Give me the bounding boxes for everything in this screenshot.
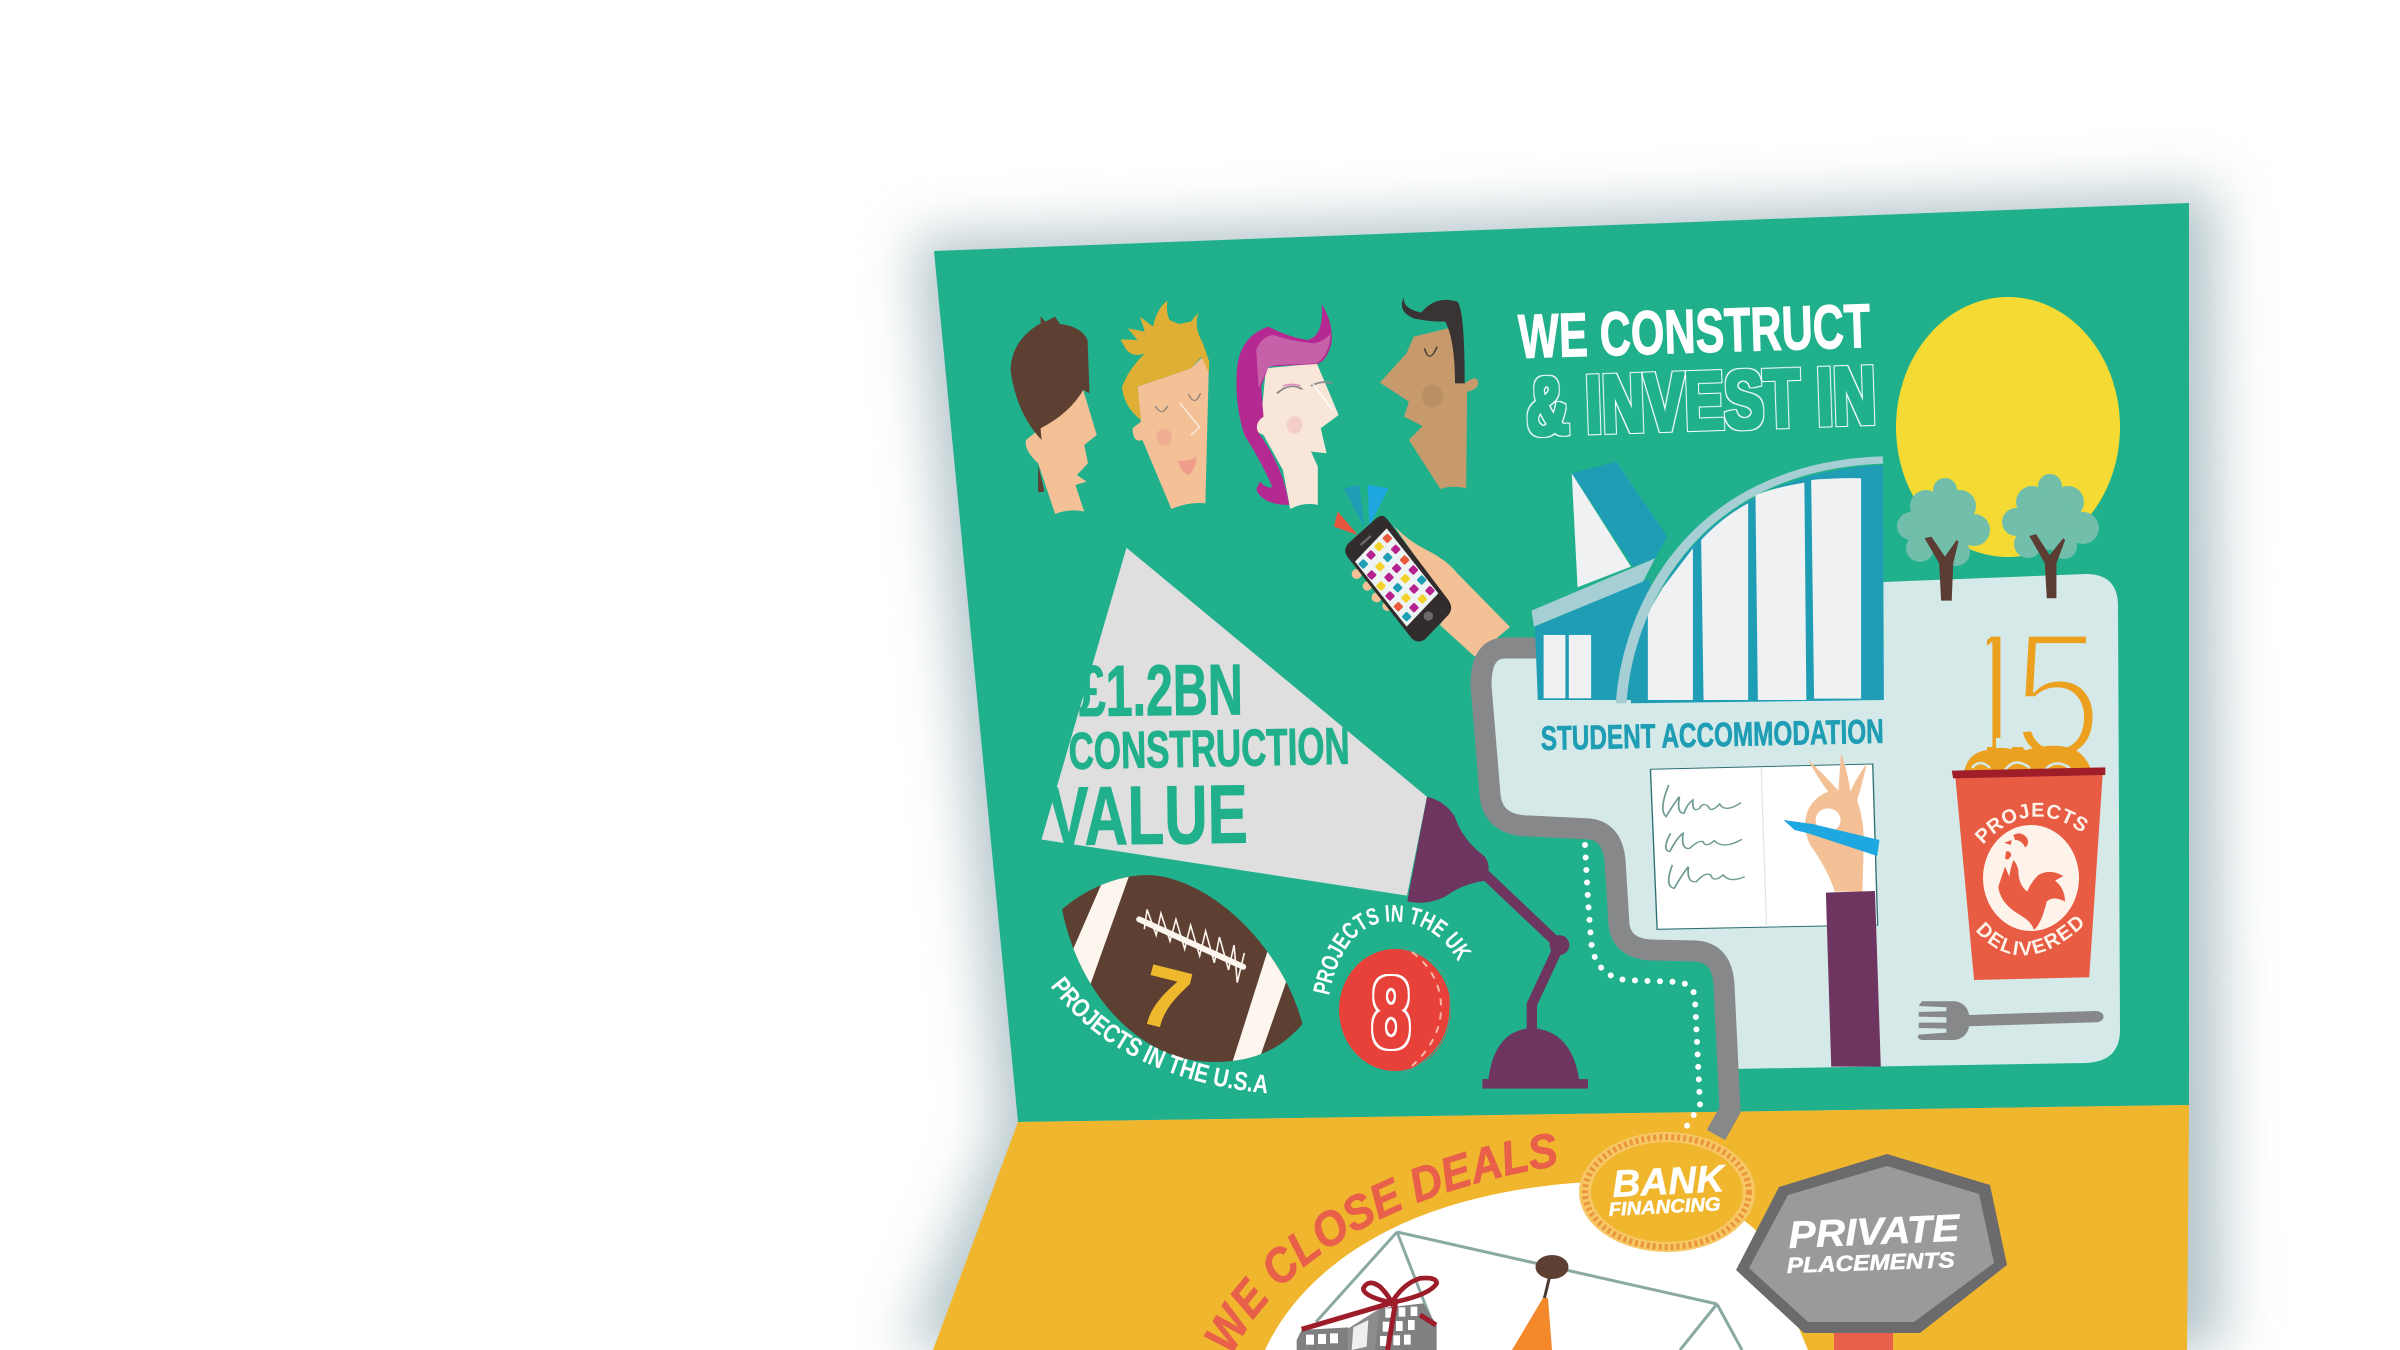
icon: gift-wrapped building bbox=[1297, 1278, 1437, 1350]
icon: student building bbox=[1532, 460, 1884, 703]
icon: four faces bbox=[1011, 297, 1478, 514]
icon: noodles forming number 15: 5 bbox=[2012, 595, 2102, 796]
icon: cricket ball bbox=[1339, 947, 1451, 1073]
number: 8 on cricket ball: 8 bbox=[1372, 957, 1410, 1069]
text: private placements bbox=[1786, 1207, 1962, 1278]
text: projects in the uk: PROJECTS IN THE UK bbox=[1313, 905, 1472, 995]
panel: yellow lower sheet bbox=[933, 1105, 2189, 1350]
icon: balance scale bbox=[1316, 1232, 1742, 1350]
icon: bank financing coin bbox=[1579, 1132, 1755, 1252]
connector: white dotted route bbox=[1585, 845, 1700, 1132]
text: private placements: PLACEMENTS bbox=[1786, 1247, 1955, 1278]
face: dark hair bbox=[1380, 297, 1478, 489]
icon: noodles forming number 15 bbox=[1940, 595, 2102, 796]
text: £1.2BN construction value bbox=[1048, 650, 1350, 863]
icon: post under private placements bbox=[1834, 1330, 1893, 1350]
text: private placements: PRIVATE bbox=[1788, 1207, 1962, 1257]
number: 7 on football: 7 bbox=[1132, 947, 1199, 1049]
title: we construct and invest in: & INVEST IN bbox=[1525, 348, 1877, 453]
text: student accommodation: STUDENT ACCOMMODATION bbox=[1540, 713, 1884, 758]
icon: signal wedges bbox=[1334, 485, 1389, 535]
text: projects delivered: PROJECTS bbox=[1974, 802, 2088, 844]
text: £1.2BN construction value: VALUE bbox=[1048, 768, 1248, 863]
icon: hand holding phone bbox=[1345, 516, 1510, 657]
title: we construct and invest in bbox=[1517, 292, 1877, 453]
icon: open notebook with writing hand bbox=[1650, 753, 1881, 1067]
icon: trees bbox=[1897, 474, 2099, 601]
panel: teal upper sheet bbox=[934, 203, 2189, 1122]
icon: desk lamp bbox=[1407, 797, 1588, 1089]
text: projects delivered: DELIVERED bbox=[1976, 916, 2083, 956]
icon: sun bbox=[1896, 297, 2120, 557]
shape: white dome bbox=[1265, 1182, 1808, 1350]
face: pink hair bbox=[1236, 304, 1339, 509]
panel: student accommodation pale background bbox=[1481, 574, 2120, 1069]
icon: rooster bbox=[1998, 833, 2065, 930]
text: £1.2BN construction value: CONSTRUCTION bbox=[1068, 718, 1350, 781]
text: bank financing: BANK bbox=[1611, 1158, 1728, 1206]
icon: lamp light beam bbox=[1042, 548, 1427, 896]
text: bank financing: FINANCING bbox=[1608, 1194, 1721, 1221]
title: we construct and invest in: WE CONSTRUCT bbox=[1517, 292, 1871, 372]
text: £1.2BN construction value: £1.2BN bbox=[1078, 650, 1243, 732]
icon: noodle cup bbox=[1952, 767, 2106, 980]
text: projects in the usa: PROJECTS IN THE U.S.A bbox=[1050, 976, 1267, 1094]
face: blond hair bbox=[1121, 301, 1209, 509]
icon: fork bbox=[1918, 1001, 2096, 1040]
icon: american football bbox=[1062, 872, 1302, 1066]
icon: private placements octagon bbox=[1736, 1154, 2007, 1333]
icon: noodles forming number 15: 1 bbox=[1949, 595, 2039, 796]
shadow behind the sheet bbox=[905, 190, 2222, 1350]
text: projects delivered bbox=[1974, 802, 2088, 956]
face: brown hair bbox=[1011, 316, 1097, 514]
connector: grey road bbox=[1481, 648, 1730, 1135]
